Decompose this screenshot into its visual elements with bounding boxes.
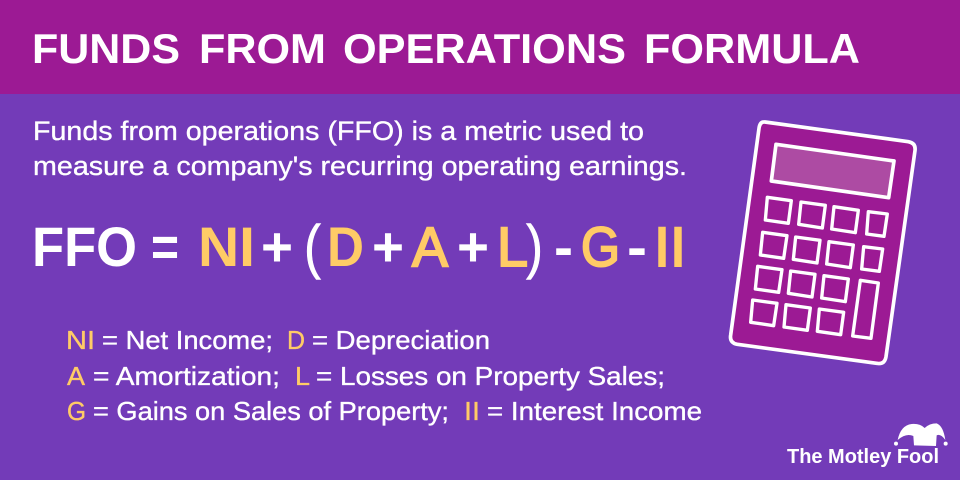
legend: II — [464, 396, 480, 426]
formula: + — [261, 215, 293, 278]
legend: = Amortization; — [93, 361, 280, 391]
logo: The Motley Fool — [787, 423, 948, 468]
legend: = Interest Income — [487, 396, 702, 426]
logo jester hat — [894, 423, 948, 446]
formula: FFO — [32, 215, 137, 278]
formula: D — [327, 215, 364, 278]
legend — [66, 325, 702, 426]
intro text — [33, 116, 687, 181]
formula — [32, 213, 686, 280]
formula: ) — [526, 213, 543, 280]
intro text: Funds from operations (FFO) is a metric used to — [33, 116, 644, 146]
logo wordmark: The Motley Fool — [787, 446, 939, 468]
formula: L — [497, 215, 528, 278]
legend: D — [287, 325, 305, 355]
legend: G — [67, 396, 86, 426]
icon: calculator — [730, 122, 915, 364]
formula: - — [627, 215, 647, 278]
title: FUNDS — [32, 25, 180, 72]
legend: = Gains on Sales of Property; — [93, 396, 449, 426]
formula: G — [581, 215, 620, 278]
title — [32, 25, 860, 72]
formula: NI — [198, 215, 255, 278]
formula: II — [654, 215, 686, 278]
formula: = — [151, 215, 179, 278]
legend: = Depreciation — [312, 325, 490, 355]
title: OPERATIONS — [343, 25, 626, 72]
legend: = Net Income; — [102, 325, 273, 355]
legend: NI — [66, 325, 95, 355]
title: FROM — [199, 25, 326, 72]
title: FORMULA — [644, 25, 860, 72]
legend: = Losses on Property Sales; — [316, 361, 665, 391]
legend: A — [67, 361, 86, 391]
formula: - — [554, 215, 573, 278]
header band — [0, 0, 960, 94]
formula: ( — [304, 213, 321, 280]
formula: + — [457, 215, 489, 278]
formula: A — [412, 215, 449, 278]
legend: L — [295, 361, 310, 391]
formula: + — [372, 215, 404, 278]
intro text: measure a company's recurring operating earnings. — [33, 151, 687, 181]
